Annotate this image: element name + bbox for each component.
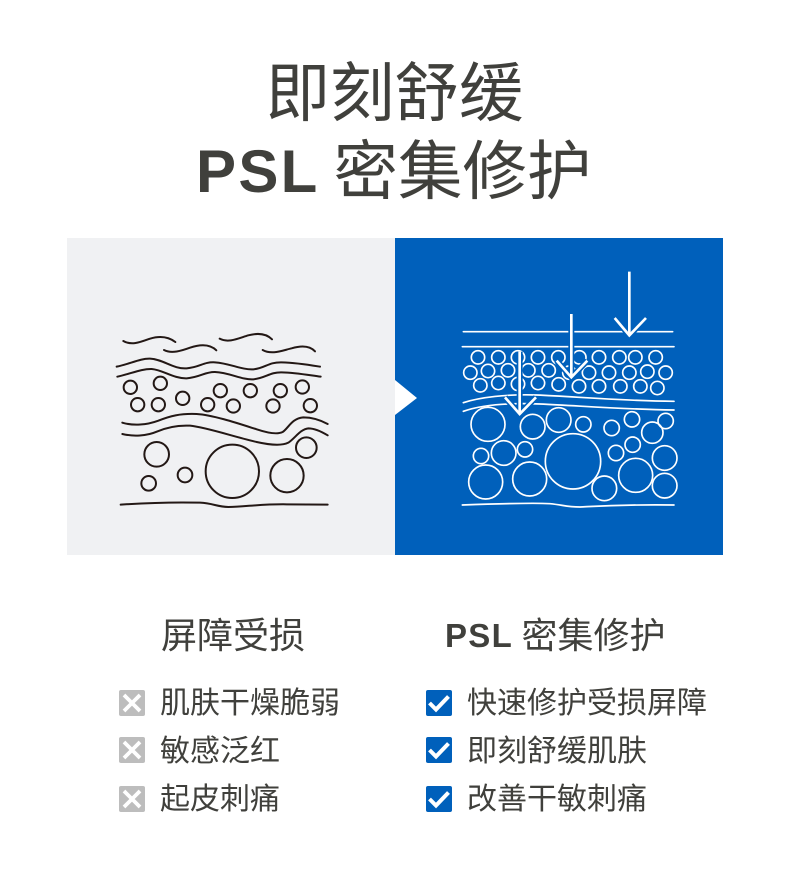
panel: damaged skin diagram xyxy=(67,238,395,555)
item text: 起皮刺痛 xyxy=(160,783,280,816)
icon: check xyxy=(426,737,452,763)
heading: PSL repair xyxy=(445,615,666,656)
item text: 即刻舒缓肌肤 xyxy=(467,735,647,768)
item text: 改善干敏刺痛 xyxy=(467,783,647,816)
icon: cross xyxy=(119,690,145,716)
list: PSL benefits xyxy=(426,687,707,816)
icon: check xyxy=(426,690,452,716)
arrow: divider pointer xyxy=(395,380,417,415)
item text: 肌肤干燥脆弱 xyxy=(160,687,340,720)
icon: check xyxy=(426,786,452,812)
title line 2: PSL: PSL xyxy=(196,138,320,205)
icon: cross xyxy=(119,737,145,763)
heading text: 密集修护 xyxy=(522,615,666,656)
title line 1: 即刻舒缓 xyxy=(266,58,524,130)
icon: cross xyxy=(119,786,145,812)
item text: 敏感泛红 xyxy=(160,735,280,768)
panel: PSL repair diagram xyxy=(395,238,723,555)
heading: damaged barrier: 屏障受损 xyxy=(161,615,305,656)
title line 2: text: 密集修护 xyxy=(334,136,592,208)
list: damage symptoms xyxy=(119,687,340,816)
heading PSL: PSL xyxy=(445,617,513,654)
item text: 快速修护受损屏障 xyxy=(467,687,707,720)
title xyxy=(196,58,592,208)
